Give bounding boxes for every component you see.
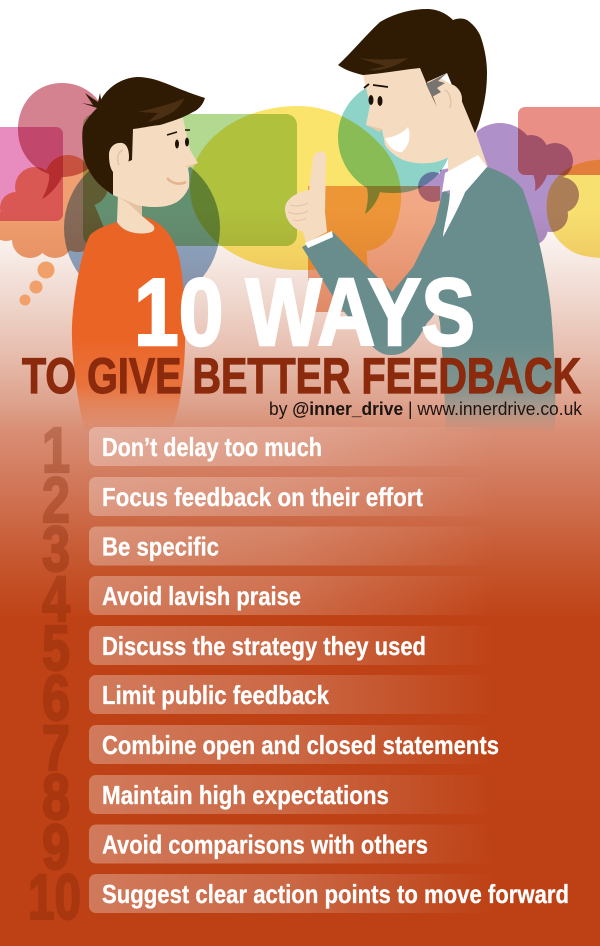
item 4: Avoid lavish praise [102,581,301,611]
list of ten feedback tips [28,414,569,933]
man face details [364,84,410,152]
item 10: 10 [28,861,81,933]
man collar and shirt [442,155,487,237]
bubble: blue circle [64,150,220,306]
item 9 [42,811,495,883]
item 2: 2 [42,464,70,536]
boy face details [167,130,198,184]
speech bubbles backdrop [0,80,600,312]
item 6: 6 [42,662,70,734]
item 4 [42,563,495,635]
item 1: Don’t delay too much [102,432,322,462]
boy hair [82,77,205,195]
figures with fade [72,9,555,432]
man hand [285,151,327,243]
bubble: teal speech [338,80,452,214]
item 10 [28,861,569,933]
item 5 [42,612,495,684]
title: 10 WAYS [134,259,475,366]
item 7 [42,712,499,784]
icon: bubble tail [531,170,548,191]
item 7: Combine open and closed statements [102,730,499,760]
bubble: green square [83,114,297,246]
item 8 [42,761,495,833]
boy head [113,118,198,207]
bubble: salmon rectangle [308,186,440,312]
bubble: yellow speech [190,106,401,302]
man cuff [305,231,333,248]
item 3 [42,513,495,585]
item 1 [42,414,495,486]
item 9: 9 [42,811,70,883]
boy ear [109,143,129,173]
item 4: 4 [42,563,70,635]
man neck [448,130,488,195]
byline: by @inner_drive | www.innerdrive.co.uk [269,398,583,419]
item 9: Avoid comparisons with others [102,830,428,860]
item 8: Maintain high expectations [102,780,389,810]
item 6 [42,662,495,734]
item 1: 1 [42,414,70,486]
bubble: orange thought cloud [0,155,108,258]
boy neck [117,195,154,233]
man hair [338,9,487,133]
bubble: pink square [0,127,63,221]
item 5: 5 [42,612,70,684]
item 5: Discuss the strategy they used [102,631,426,661]
item 2: Focus feedback on their effort [102,482,423,512]
bubble: salmon right square [518,107,600,175]
item 6: Limit public feedback [102,680,329,710]
item 8: 8 [42,761,70,833]
item 3: Be specific [102,532,219,562]
man ear [440,84,462,108]
bubble: yellow right speech [547,159,600,258]
bubble: purple cloud [418,123,579,246]
man jacket [302,167,555,432]
item 7: 7 [42,712,70,784]
figure: boy [72,77,205,430]
man head [363,65,477,163]
item 3: 3 [42,513,70,585]
figure: man [285,9,555,432]
boy shirt [72,216,185,430]
bubble: red round speech [18,83,108,199]
icon: thought dots [20,262,54,306]
item 2 [42,464,495,536]
boy neck shadow [118,197,142,216]
